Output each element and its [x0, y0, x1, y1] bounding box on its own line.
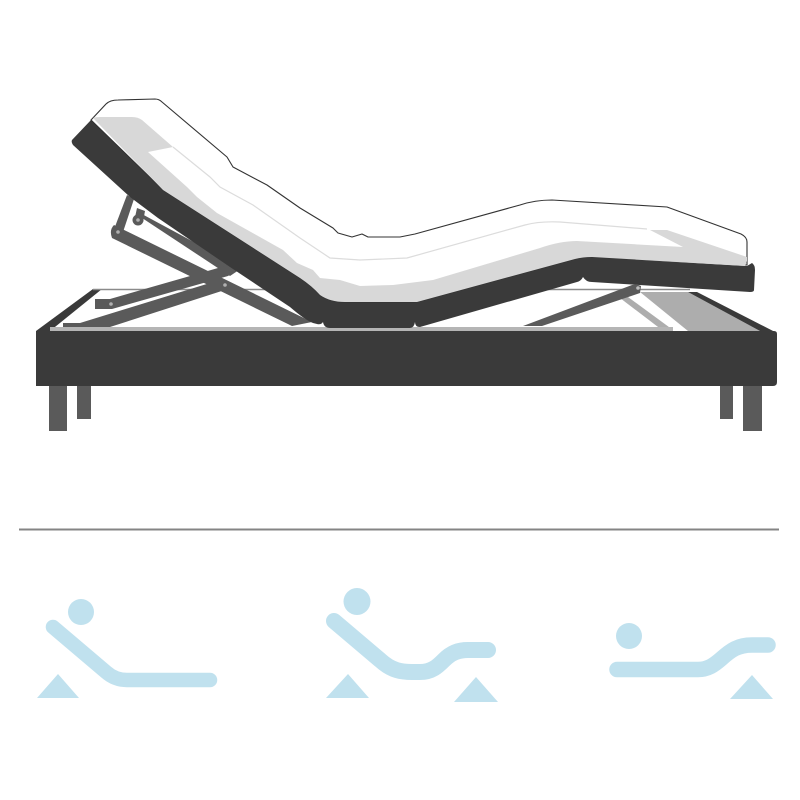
- mattress: [91, 99, 747, 302]
- bed base: [36, 331, 777, 386]
- front legs: [49, 384, 762, 431]
- bed illustration: [36, 99, 777, 431]
- lift mechanism left: [63, 195, 312, 327]
- icon: feet raised position: [616, 623, 773, 699]
- mattress seam line: [173, 147, 647, 260]
- icon: head and feet raised position: [326, 588, 498, 702]
- right pivot: [636, 286, 640, 290]
- bed frame rails: [36, 289, 777, 333]
- back legs: [77, 384, 733, 419]
- divider: [19, 528, 779, 530]
- mattress base platform: [72, 120, 755, 328]
- icon: head raised position: [37, 599, 210, 698]
- pivot points: [109, 218, 227, 306]
- lift mechanism right: [523, 285, 641, 326]
- mattress shading: [93, 117, 747, 302]
